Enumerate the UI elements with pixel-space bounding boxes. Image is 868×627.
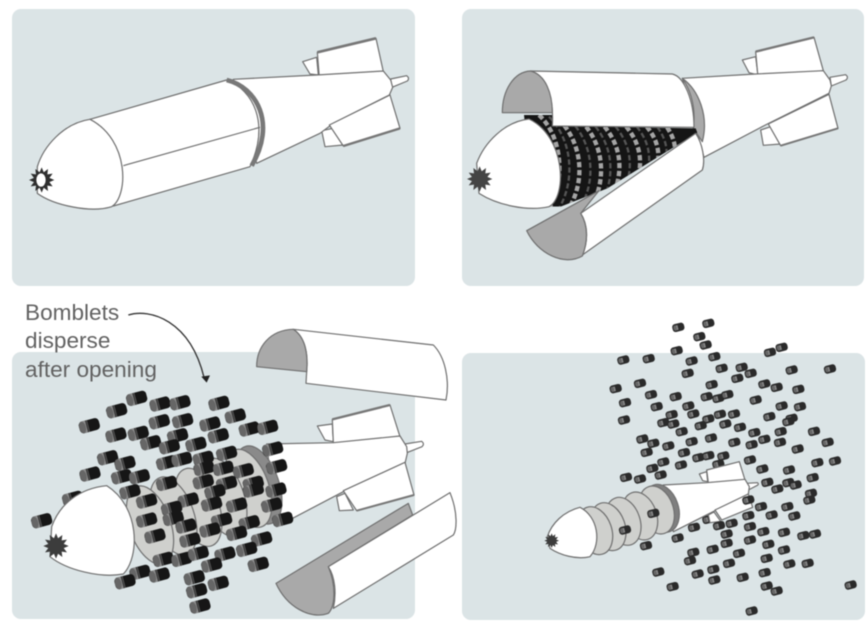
icon: tapered tail body: [682, 71, 831, 157]
icon: bomb casing: [90, 80, 259, 206]
icons: scattered bomblets: [609, 318, 857, 616]
icon: lower tail fin: [343, 462, 414, 511]
icon: upper tail fins: [317, 405, 400, 443]
icon: tail pin: [747, 483, 758, 490]
icon: lower casing half: [527, 133, 704, 260]
icon: tapered tail body: [663, 479, 749, 532]
illustration: bomblets dispersing from opened bomb: [30, 313, 456, 615]
icon: fuse star: [29, 167, 54, 193]
icon: fuse star: [43, 533, 69, 559]
icon: lower small fin: [708, 512, 721, 523]
icon: tail pin: [830, 75, 847, 86]
illustration: casing splitting open: [467, 37, 847, 260]
callout: bomblets disperse after opening: disperse: [25, 328, 110, 353]
icons: bomblets behind tail: [702, 459, 725, 525]
icon: lower small fin: [761, 127, 781, 145]
panel: bomblets scattered background: [462, 353, 865, 620]
icon: nose cone: [50, 486, 134, 575]
arrow: callout pointer: [128, 313, 210, 383]
icon: nose cone: [547, 507, 597, 558]
icon: packed bomblets: [524, 110, 701, 210]
icon: casing ring: [227, 80, 263, 166]
icons: dispersing bomblets: [30, 390, 294, 614]
icon: tapered tail body: [233, 71, 393, 163]
icon: tapered tail body: [267, 436, 407, 527]
icon: casing seam: [123, 127, 260, 166]
icon: lower small fin: [322, 128, 343, 147]
icon: upper casing half: [502, 71, 694, 127]
panel: intact bomb background: [12, 9, 415, 286]
icon: bomblet behind nose: [61, 490, 84, 507]
icon: nose cone: [477, 119, 560, 208]
icon: tail pin: [391, 76, 409, 87]
icon: tail pin: [405, 441, 423, 453]
icon: lower casing half: [276, 493, 456, 615]
callout: bomblets disperse after opening: Bomblets: [25, 300, 119, 325]
icon: lower small fin: [337, 493, 353, 511]
icon: lower tail fin: [715, 494, 753, 520]
icon: inner casing rim: [682, 78, 704, 142]
icon: exposed bomblet core: [117, 440, 291, 570]
icon: fuse star: [544, 533, 559, 548]
panel: shell opening background: [462, 9, 864, 286]
icon: lower tail fin: [768, 94, 838, 146]
panel: bomblets dispersing background: [12, 352, 415, 619]
icon: upper tail fins: [303, 38, 383, 78]
icon: upper tail fins: [699, 462, 745, 483]
icon: upper tail fins: [742, 37, 823, 77]
illustration: bomblets scattered widely: [544, 318, 857, 616]
icon: upper casing half: [257, 329, 447, 400]
icon: exposed bomblet core: [571, 480, 685, 559]
callout: bomblets disperse after opening: after opening: [25, 357, 157, 382]
icon: nose cone: [37, 119, 123, 209]
illustration: intact cluster bomb: [29, 38, 409, 209]
icon: lower tail fin: [329, 95, 400, 146]
icon: fuse star: [467, 166, 492, 192]
